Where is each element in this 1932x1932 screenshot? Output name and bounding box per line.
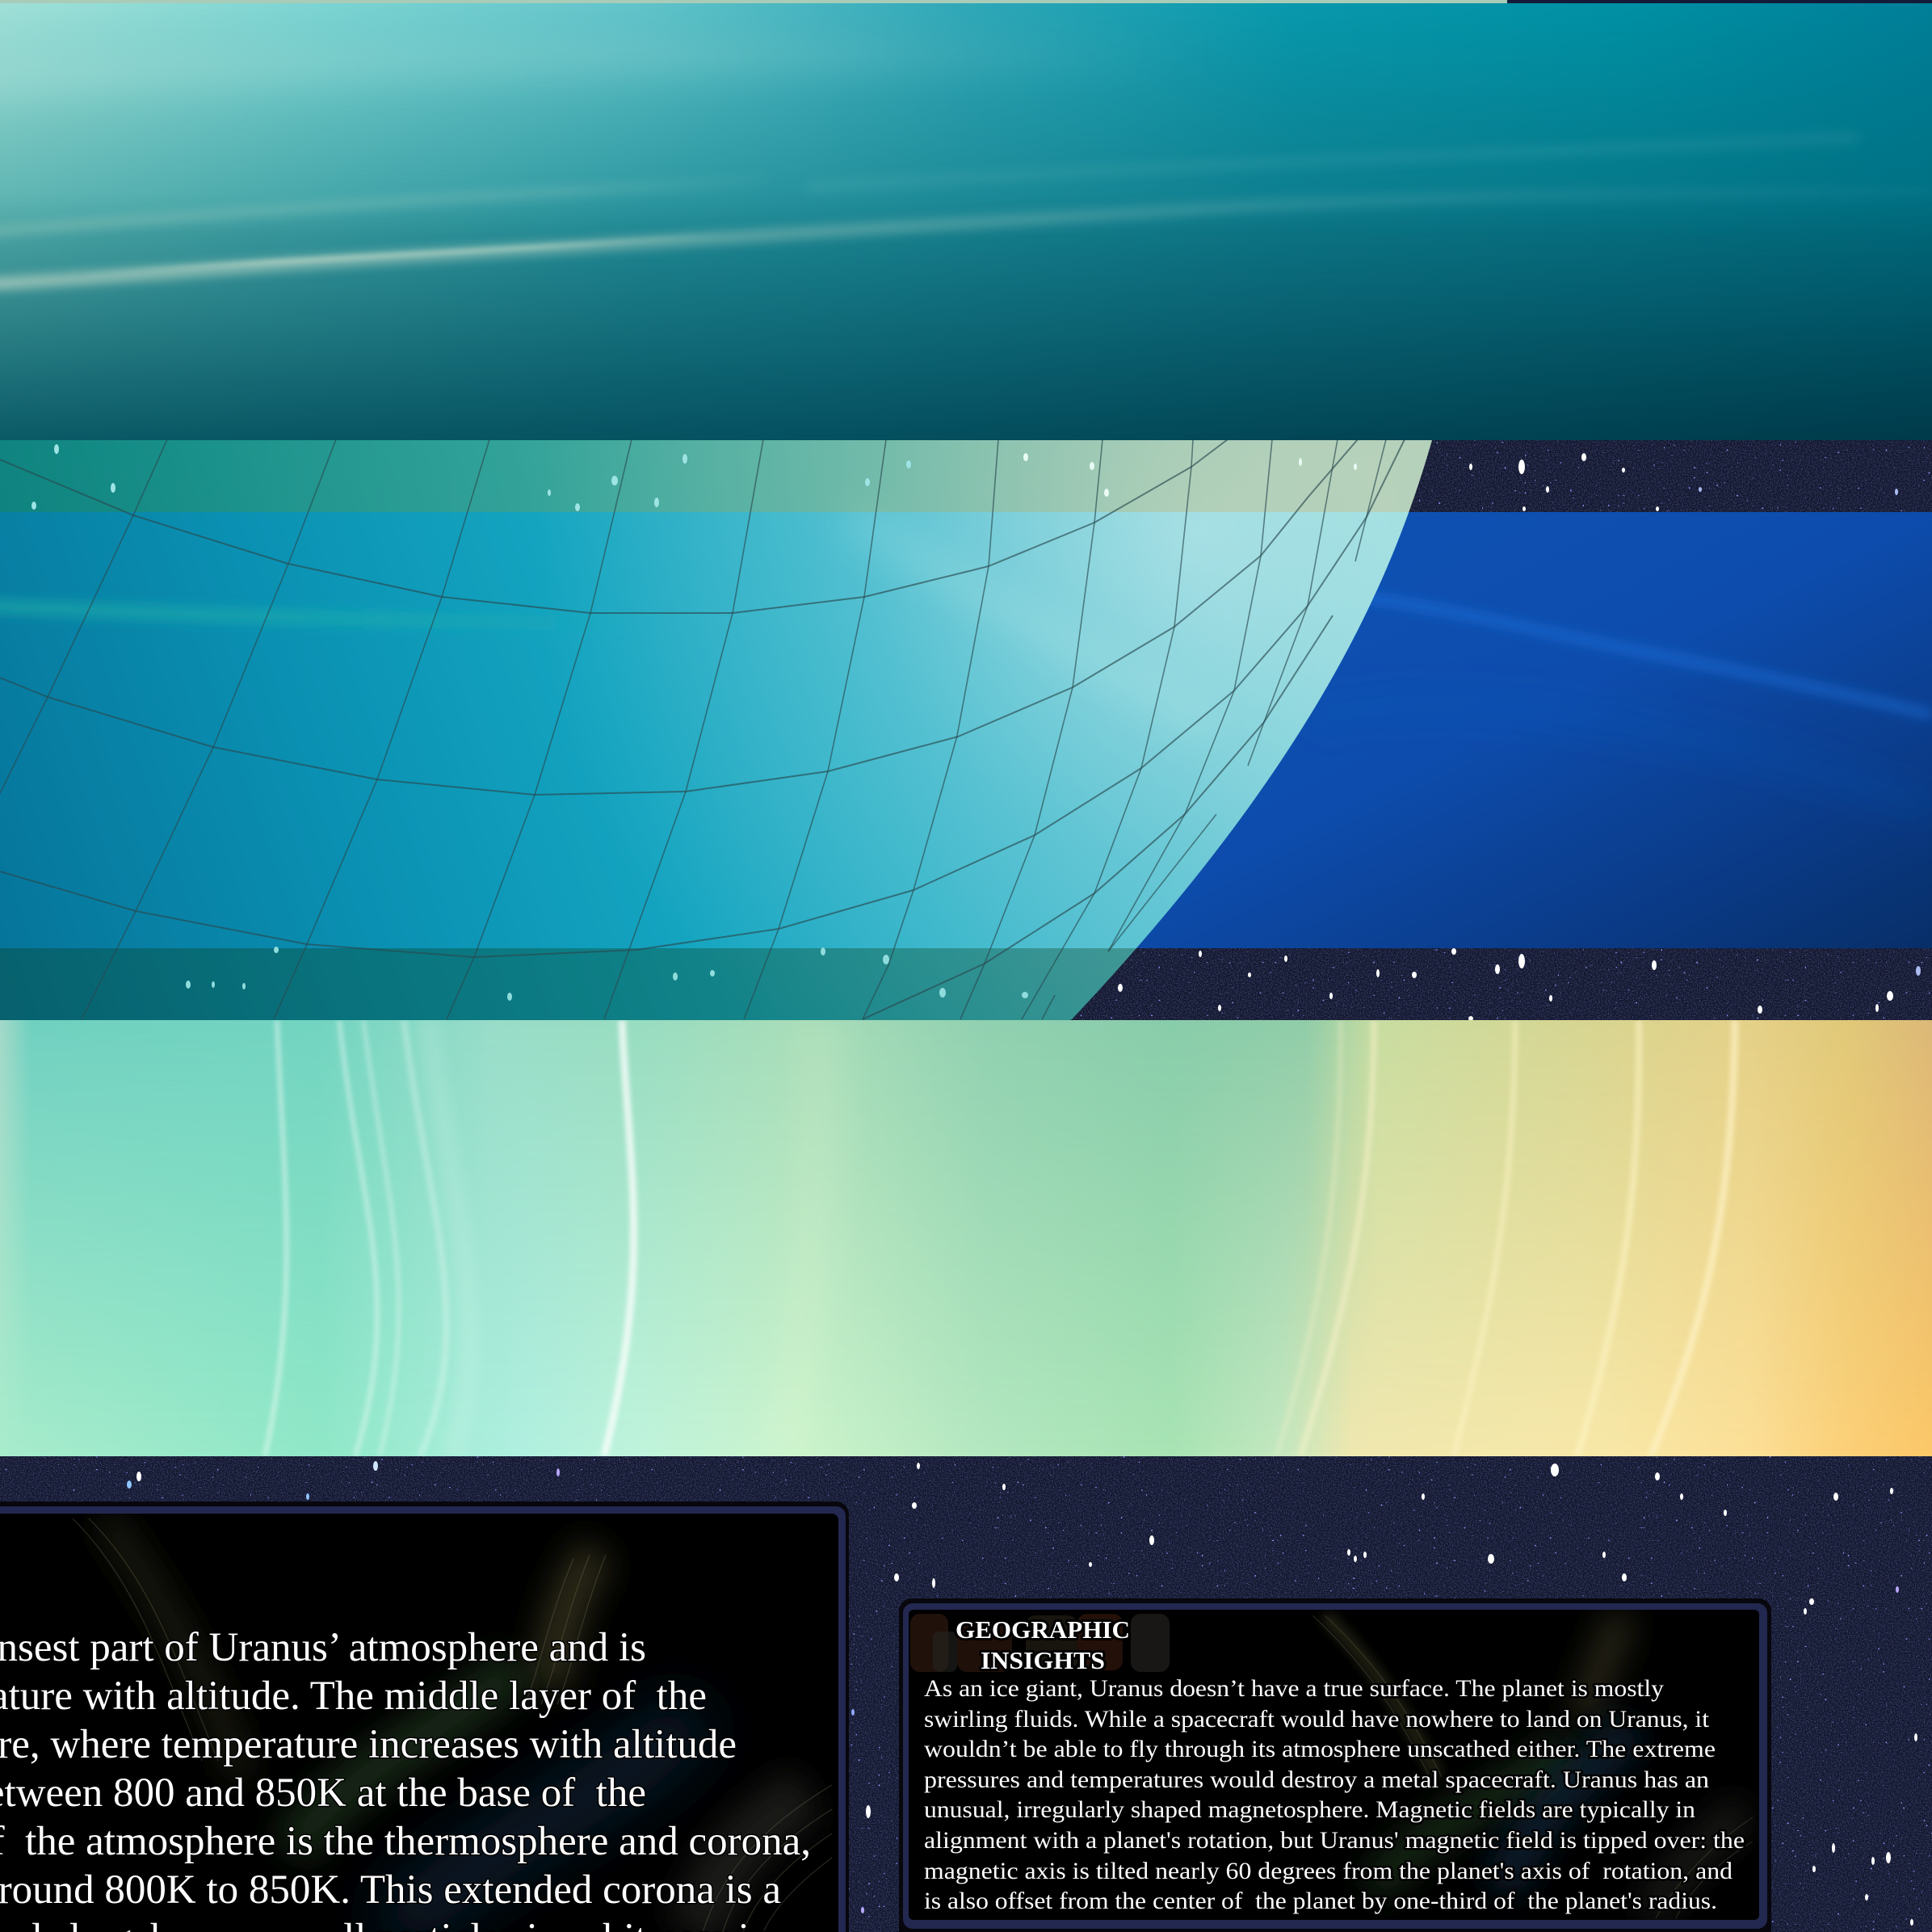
dimmed planet band: upper <box>0 440 1446 512</box>
panel title: INSIGHTS <box>981 1646 1105 1674</box>
panel body text: unusual, irregularly shaped magnetosphere. Magnetic fields are typically in <box>924 1796 1695 1823</box>
band: teal cloud tops <box>0 3 1932 440</box>
planet disc <box>0 0 1507 1050</box>
panel body text: swirling fluids. While a spacecraft would have nowhere to land on Uranus, it <box>924 1706 1710 1732</box>
panel body text: is also offset from the center of the planet by one-third of the planet's radius. <box>924 1888 1717 1914</box>
cloud streaks <box>0 54 1932 284</box>
blue band behind planet <box>1050 512 1932 948</box>
title backdrop pattern <box>910 1614 1170 1672</box>
panel body text <box>924 1675 1745 1914</box>
top sliver of planet and stars <box>0 0 1932 3</box>
graticule on planet <box>0 439 1405 1019</box>
panel: atmosphere layers <box>0 1502 849 1932</box>
band: green and gold ring detail <box>0 1020 1932 1456</box>
dimmed planet band: lower <box>0 947 1171 1020</box>
panel body text <box>0 1625 811 1932</box>
panel body text: around 800K to 850K. This extended corona is a <box>0 1867 781 1913</box>
panel body text: wouldn’t be able to fly through its atmosphere unscathed either. The extreme <box>924 1736 1716 1762</box>
panel texture <box>73 1518 832 1932</box>
panel body text: pressures and temperatures would destroy a metal spacecraft. Uranus has an <box>924 1766 1709 1793</box>
panel: geographic insights <box>899 1598 1771 1932</box>
panel body text: magnetic axis is tilted nearly 60 degrees from the planet's axis of rotation, and <box>924 1858 1732 1884</box>
panel body text: alignment with a planet's rotation, but Uranus' magnetic field is tipped over: the <box>924 1827 1745 1854</box>
panel texture <box>1312 1615 1753 1918</box>
ring streaks <box>265 1020 1735 1456</box>
planet highlight <box>0 440 1432 1020</box>
panel title <box>956 1615 1130 1674</box>
panel body text: As an ice giant, Uranus doesn’t have a true surface. The planet is mostly <box>924 1675 1664 1702</box>
panel title: GEOGRAPHIC <box>956 1615 1130 1644</box>
